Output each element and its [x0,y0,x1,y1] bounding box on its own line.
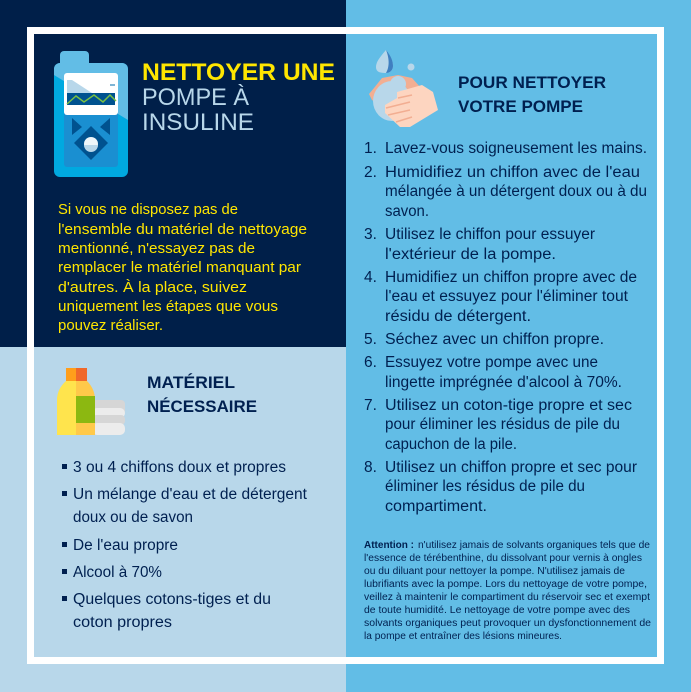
attention note: de toute humidité. Le nettoyage de votre pompe avec des [364,605,630,616]
bullet 2 [62,486,308,526]
bullet 5: Quelques cotons-tiges et du [73,591,271,608]
step 2: savon. [385,203,429,220]
step 4: l'eau et essuyez pour l'éliminer tout [385,288,629,305]
step 2: mélangée à un détergent doux ou à du [385,183,647,200]
attention note: la pompe et entraîner des lésions mineures. [364,631,562,642]
step 7: 7. [364,397,377,414]
intro text block: Si vous ne disposez pas de [58,201,238,218]
intro text block: d'autres. À la place, suivez [58,279,247,296]
heading: materials: MATÉRIEL [147,373,235,392]
bullet 3: De l'eau propre [73,537,178,554]
panel: cleaning steps background [346,0,691,692]
bullet 5: coton propres [73,614,172,631]
numbered cleaning steps [364,140,647,515]
step 3: 3. [364,226,377,243]
step 5: Séchez avec un chiffon propre. [385,331,604,348]
attention note: l'essence de térébenthine, du dissolvant pour vernis à ongles [364,553,642,564]
heading: cleaning steps: POUR NETTOYER [458,73,606,92]
heading: materials: NÉCESSAIRE [147,397,257,416]
icon: washing hands [369,50,438,127]
panel: navy intro background [0,0,346,347]
attention note: Attention : [364,540,414,551]
step 4: résidu de détergent. [385,308,531,325]
intro text block [58,201,307,334]
attention note: veillez à maintenir le compartiment du réservoir sec et exempt [364,592,650,603]
intro text block: mentionné, n'essayez pas de [58,240,255,257]
bullet 5 [62,591,271,631]
title [142,59,335,136]
attention note [364,540,651,642]
attention note: solvants organiques peut provoquer un dysfonctionnement de [364,618,651,629]
bullet 2: doux ou de savon [73,509,193,526]
step 8: éliminer les résidus de pile du [385,478,585,495]
attention note: lubrifiants avec la pompe. Lors du nettoyage de votre pompe, [364,579,647,590]
intro text block: pouvez réaliser. [58,317,163,334]
step 6: 6. [364,354,377,371]
intro text block: l'ensemble du matériel de nettoyage [58,221,307,238]
step 7: pour éliminer les résidus de pile du [385,416,620,433]
step 8: compartiment. [385,498,487,515]
intro text block: uniquement les étapes que vous [58,298,278,315]
title: INSULINE [142,109,254,136]
title: NETTOYER UNE [142,59,335,86]
step 8 [364,459,637,515]
materials list [62,459,308,631]
heading: cleaning steps: VOTRE POMPE [458,97,583,116]
step 7: capuchon de la pile. [385,436,517,453]
step 1: Lavez-vous soigneusement les mains. [385,140,647,157]
step 1: 1. [364,140,377,157]
step 6 [364,354,622,391]
attention note: ou du diluant pour nettoyer la pompe. N'utilisez jamais de [364,566,625,577]
step 8: Utilisez un chiffon propre et sec pour [385,459,637,476]
heading: materials [147,373,257,416]
title: POMPE À [142,84,249,111]
step 2 [364,164,647,220]
panel: materials background [0,347,346,692]
step 2: 2. [364,164,377,181]
step 4: 4. [364,269,377,286]
intro text block: remplacer le matériel manquant par [58,259,301,276]
bullet 2: Un mélange d'eau et de détergent [73,486,308,503]
icon: insulin pump [54,51,128,177]
step 5: 5. [364,331,377,348]
icon: bottle and towels [57,368,125,435]
step 2: Humidifiez un chiffon avec de l'eau [385,164,640,181]
step 4 [364,269,637,325]
step 6: lingette imprégnée d'alcool à 70%. [385,374,622,391]
step 3 [364,226,595,263]
bullet 1: 3 ou 4 chiffons doux et propres [73,459,286,476]
step 4: Humidifiez un chiffon propre avec de [385,269,637,286]
attention note: n'utilisez jamais de solvants organiques tels que de [418,540,650,551]
step 3: l'extérieur de la pompe. [385,246,556,263]
heading: cleaning steps [458,73,606,116]
step 7 [364,397,632,453]
bullet 4: Alcool à 70% [73,564,162,581]
step 3: Utilisez le chiffon pour essuyer [385,226,595,243]
step 8: 8. [364,459,377,476]
step 7: Utilisez un coton-tige propre et sec [385,397,632,414]
step 6: Essuyez votre pompe avec une [385,354,598,371]
